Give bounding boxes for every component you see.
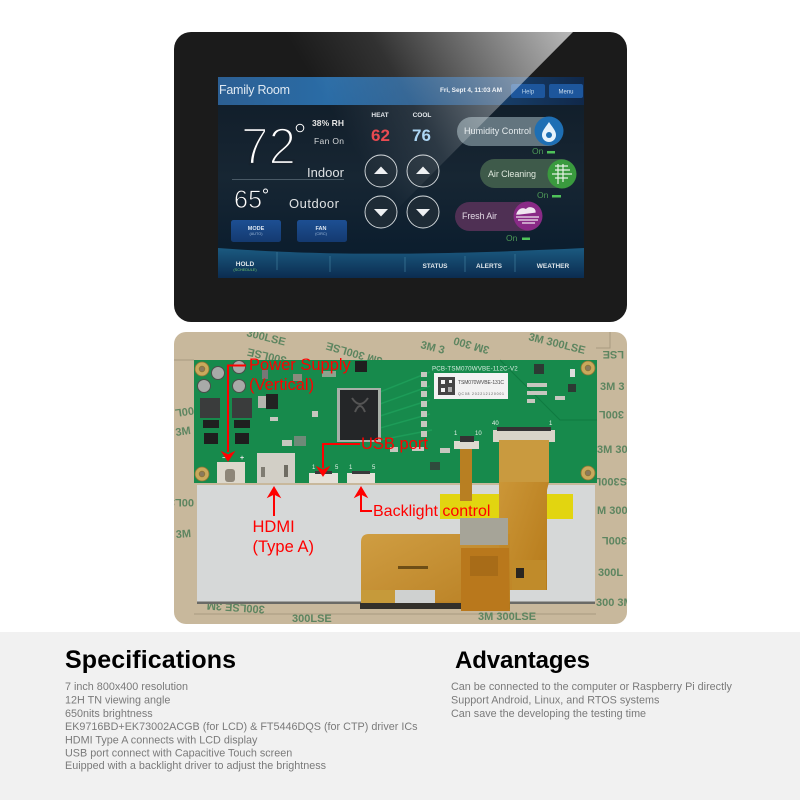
bottom navigation bar: HOLD — [236, 261, 255, 268]
adhesive backing sheet: LSE — [603, 348, 624, 360]
capacitors and inductors — [198, 360, 576, 470]
HDMI connector — [257, 453, 295, 483]
adhesive backing sheet: 3M 3 — [419, 339, 446, 357]
air cleaning pill — [480, 159, 576, 200]
adhesive backing sheet: S300L — [594, 475, 627, 487]
power connector: + — [240, 455, 244, 462]
adhesive backing sheet: 3M — [175, 528, 191, 541]
label: backlight control: Backlight control — [373, 503, 490, 520]
adhesive backing sheet: 3M 30 — [597, 444, 628, 456]
heat and cool setpoints: 62 — [371, 126, 390, 145]
heading: specifications: Specifications — [65, 646, 236, 674]
specifications list: 12H TN viewing angle — [65, 694, 170, 706]
specifications list: HDMI Type A connects with LCD display — [65, 734, 258, 746]
backlight connector: 5 — [372, 465, 376, 471]
lower flexible printed circuit — [361, 534, 546, 611]
specifications list: Euipped with a backlight driver to adjust the brightness — [65, 760, 327, 772]
specifications list: 650nits brightness — [65, 708, 153, 720]
up and down buttons — [365, 155, 439, 228]
advantages list: Can save the developing the testing time — [451, 708, 646, 720]
screen header bar: Family Room — [219, 83, 290, 97]
panel: driver board rear view — [160, 327, 633, 625]
QR label — [434, 373, 508, 399]
adhesive backing sheet: 3M 300LSE — [527, 331, 587, 357]
screen header bar: Help — [522, 90, 535, 96]
display screen — [218, 77, 584, 278]
adhesive backing sheet: 300L — [602, 534, 627, 546]
bottom navigation bar: (SCHEDULE) — [233, 268, 257, 272]
specifications list: EK9716BD+EK73002ACGB (for LCD) & FT5446DQS (for CTP) driver ICs — [65, 721, 418, 733]
temperature readout: 38% RH — [312, 118, 344, 128]
fresh air pill — [455, 202, 542, 243]
air cleaning pill: Air Cleaning — [488, 169, 536, 179]
40 pin flex cable: 40 — [492, 421, 499, 427]
mode and fan buttons: MODE — [248, 226, 265, 232]
adhesive backing sheet — [160, 327, 633, 625]
QR label: TSM070WVBE-131C — [458, 380, 504, 386]
adhesive backing sheet: 3M 300LSE — [325, 339, 384, 367]
adhesive backing sheet: 300L — [598, 567, 623, 579]
screen header bar: Menu — [558, 90, 574, 96]
temperature readout: 65 — [234, 186, 262, 214]
power connector: − — [222, 455, 226, 462]
temperature readout: Indoor — [307, 165, 345, 180]
label: type A: (Type A) — [252, 538, 314, 556]
adhesive backing sheet: 300LSE — [246, 345, 288, 366]
LCD metal back — [197, 485, 595, 609]
air cleaning pill: On — [537, 190, 549, 200]
device black bezel — [174, 32, 627, 322]
40 pin flex cable: 1 — [549, 421, 553, 427]
adhesive backing sheet: 00L — [174, 404, 195, 419]
USB connector: 1 — [312, 465, 316, 471]
adhesive backing sheet: 3M 300 — [452, 334, 491, 356]
mode and fan buttons — [231, 220, 347, 242]
screen header bar — [218, 77, 584, 105]
panel: text footer — [0, 632, 800, 800]
fresh air pill: Fresh Air — [462, 211, 497, 221]
yellow tape — [440, 494, 573, 519]
label: USB port: USB port — [361, 435, 428, 453]
adhesive backing sheet: 3M — [175, 425, 192, 439]
screen header bar: Fri, Sept 4, 11:03 AM — [440, 87, 502, 94]
adhesive backing sheet: 300LSE — [292, 613, 332, 625]
advantages list: Can be connected to the computer or Raspberry Pi directly — [451, 681, 732, 693]
heat and cool setpoints: HEAT — [371, 112, 389, 119]
heat and cool setpoints — [371, 112, 431, 145]
advantages list — [451, 681, 732, 720]
specifications list — [65, 681, 418, 772]
adhesive backing sheet: 300L — [599, 408, 624, 420]
heat and cool setpoints: 76 — [412, 126, 431, 145]
adhesive backing sheet: 3M 300LSE — [478, 611, 536, 623]
40 pin flex cable — [492, 421, 555, 590]
heading: advantages: Advantages — [455, 647, 590, 674]
mode and fan buttons: FAN — [316, 226, 327, 232]
bottom navigation bar: STATUS — [422, 263, 448, 270]
10 pin touch connector and flex — [454, 431, 482, 501]
USB connector — [309, 465, 339, 483]
specifications list: USB port connect with Capacitive Touch screen — [65, 748, 292, 760]
adhesive backing sheet: 3M 3 — [600, 381, 624, 393]
bottom navigation bar: WEATHER — [537, 263, 569, 270]
adhesive backing sheet: 300 3M — [596, 597, 633, 609]
backlight connector: 1 — [349, 465, 353, 471]
main controller chip — [337, 388, 381, 442]
label: power supply: Power Supply — [249, 356, 352, 374]
humidity control pill: On — [532, 146, 544, 156]
adhesive backing sheet: 300LSE — [245, 327, 287, 349]
mode and fan buttons: (CIRC) — [315, 232, 328, 236]
heat and cool setpoints: COOL — [413, 112, 431, 119]
footer background — [0, 632, 800, 800]
red annotation arrows — [222, 366, 372, 516]
10 pin touch connector and flex: 1 — [454, 431, 458, 437]
adhesive backing sheet: 300LSE 3M — [206, 599, 265, 615]
humidity control pill — [457, 116, 564, 156]
temperature readout: 72 — [241, 118, 296, 176]
adhesive backing sheet: M 300 — [597, 505, 628, 517]
power connector — [217, 455, 245, 483]
10 pin touch connector and flex: 10 — [475, 431, 482, 437]
temperature readout — [232, 118, 345, 214]
fresh air pill: On — [506, 233, 518, 243]
temperature readout: Outdoor — [289, 196, 340, 211]
temperature readout: Fan On — [314, 136, 344, 146]
specifications list: 7 inch 800x400 resolution — [65, 681, 188, 693]
QR label: QC08 202212120001 — [458, 392, 504, 396]
label: vertical: (Vertical) — [249, 376, 314, 394]
humidity control pill: Humidity Control — [464, 126, 531, 136]
label: HDMI: HDMI — [252, 518, 295, 536]
green circuit board — [194, 360, 597, 483]
mounting holes — [195, 361, 595, 481]
bottom navigation bar — [218, 248, 584, 278]
USB connector: 5 — [335, 465, 339, 471]
PCB silkscreen title: PCB-TSM070WVBE-112C-V2 — [432, 366, 518, 372]
advantages list: Support Android, Linux, and RTOS systems — [451, 694, 660, 706]
steel shield plate — [460, 518, 508, 545]
panel: touchscreen front view — [174, 32, 627, 322]
mode and fan buttons: (AUTO) — [249, 232, 263, 236]
adhesive backing sheet: 00LSE — [160, 496, 194, 508]
backlight connector — [347, 465, 376, 483]
bottom navigation bar: ALERTS — [476, 263, 503, 270]
glass reflection — [316, 32, 573, 194]
